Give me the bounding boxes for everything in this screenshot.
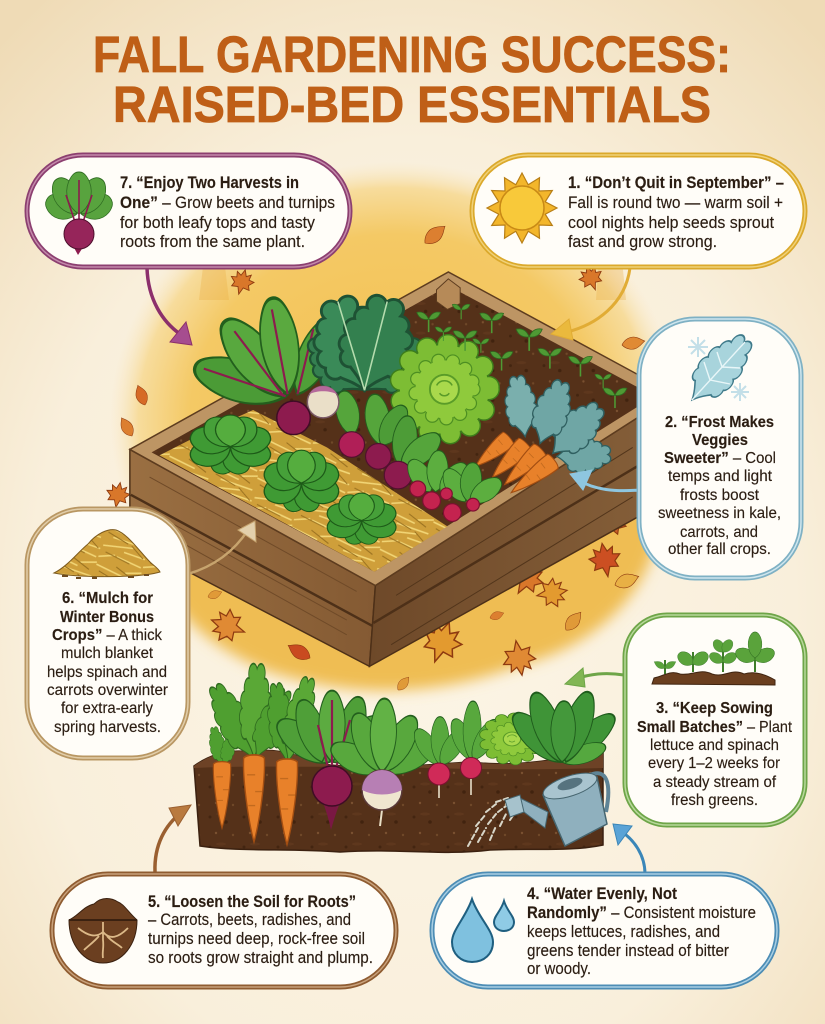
text block [120, 174, 335, 251]
text block: 2. “Frost Makes [665, 414, 774, 431]
scattered fall leaves [104, 221, 646, 693]
panel: step 2 frost [639, 319, 801, 578]
text block: 6. “Mulch for [62, 590, 153, 607]
arrow: step 3 to cross-section [565, 668, 624, 687]
bed: left wooden side [130, 449, 375, 666]
text block: 3. “Keep Sowing [656, 700, 773, 717]
plant: carrot greens [200, 663, 323, 768]
arrow: step 7 to beets [147, 268, 192, 345]
icon: water drops [452, 899, 514, 962]
text block [527, 885, 756, 978]
bed: corner post [437, 279, 460, 309]
plant: spinach in row [505, 688, 622, 771]
text block: fresh greens. [671, 792, 758, 809]
plant: lettuce [400, 345, 489, 434]
icon: mulch pile [54, 530, 160, 578]
plant: radishes in bed [402, 450, 506, 521]
text block: Fall is round two — warm soil + [568, 194, 783, 212]
text block: sweetness in kale, [658, 505, 781, 522]
panel: step 5 soil [52, 874, 396, 987]
text block: for both leafy tops and tasty [120, 214, 316, 232]
plant: beet and turnip roots [277, 386, 339, 435]
text block: Randomly” – Consistent moisture [527, 904, 756, 922]
panel: step 4 water [432, 874, 777, 987]
text block: Crops” – A thick [52, 627, 163, 644]
icon: sun [487, 173, 557, 243]
title [93, 26, 731, 133]
arrow: step 2 to carrots [570, 470, 640, 491]
watering can and spray [468, 768, 608, 846]
text block: 5. “Loosen the Soil for Roots” [148, 893, 356, 911]
bed: right wooden side [369, 394, 674, 666]
plant: spinach in mulch [186, 412, 400, 547]
plant: kale [295, 288, 434, 409]
plant: turnip with leaves [326, 698, 442, 826]
panel: step 3 sowing [625, 615, 805, 825]
bed: soil [152, 286, 654, 572]
panel: step 7 two harvests [27, 155, 350, 267]
text block [658, 414, 781, 558]
text block: frosts boost [680, 487, 760, 504]
plant: beet leaves [189, 295, 346, 415]
text block: 4. “Water Evenly, Not [527, 885, 677, 903]
text block: spring harvests. [54, 719, 161, 736]
plant: small beets [332, 389, 447, 489]
text block: – Carrots, beets, radishes, and [148, 911, 351, 929]
text block: temps and light [668, 468, 773, 485]
text block [148, 893, 373, 967]
title: FALL GARDENING SUCCESS: [93, 26, 731, 83]
arrow: step 5 to roots [155, 805, 191, 872]
soil cross-section [194, 750, 603, 852]
plant: beet with leaves [270, 691, 391, 830]
text block: for extra-early [61, 700, 153, 717]
bed: top rim [130, 272, 674, 586]
text block: Veggies [692, 432, 748, 449]
text block: keeps lettuces, radishes, and [527, 923, 720, 941]
text block: One” – Grow beets and turnips [120, 194, 335, 212]
plant: carrots in bed [470, 431, 560, 500]
text block [637, 700, 792, 809]
icon: soil with roots [69, 898, 137, 963]
text block: or woody. [527, 960, 591, 978]
arrow: step 6 to mulch [188, 521, 256, 574]
text block: 7. “Enjoy Two Harvests in [120, 174, 299, 192]
arrow: step 4 to watering can [613, 824, 645, 874]
text block: roots from the same plant. [120, 233, 305, 251]
text block: other fall crops. [668, 541, 771, 558]
plant: carrots in soil [213, 755, 297, 845]
text block: a steady stream of [653, 774, 777, 791]
text block: Small Batches” – Plant [637, 719, 792, 736]
bed: straw mulch [159, 410, 447, 572]
text block: every 1–2 weeks for [648, 755, 781, 772]
text block: greens tender instead of bitter [527, 942, 729, 960]
panel: step 1 September [472, 155, 805, 267]
text block: 1. “Don’t Quit in September” – [568, 174, 784, 192]
icon: beet [41, 172, 117, 255]
text block: Winter Bonus [60, 609, 154, 626]
plant: seedlings [417, 304, 627, 408]
text block [568, 174, 784, 251]
plant: blue-green carrot tops [501, 374, 613, 474]
text block: turnips need deep, rock-free soil [148, 930, 365, 948]
text block: fast and grow strong. [568, 233, 717, 251]
text block: Sweeter” – Cool [664, 450, 776, 467]
icon: frosted leaf [677, 326, 762, 413]
text block: carrots, and [680, 524, 758, 541]
text block: lettuce and spinach [650, 737, 779, 754]
text block: so roots grow straight and plump. [148, 949, 373, 967]
text block: cool nights help seeds sprout [568, 214, 774, 232]
arrow: step 1 to seedlings [551, 268, 630, 340]
title: RAISED-BED ESSENTIALS [113, 76, 711, 133]
autumn yellow ground backdrop [110, 162, 680, 690]
plant: lettuce in row [485, 718, 539, 760]
below-ground cross-section illustration [194, 663, 622, 852]
text block: carrots overwinter [47, 682, 169, 699]
icon: seedlings on soil [652, 632, 777, 685]
panel: step 6 mulch [27, 509, 188, 758]
text block [47, 590, 169, 736]
plant: radishes in soil [409, 701, 504, 798]
text block: mulch blanket [61, 645, 154, 662]
raised garden bed illustration [130, 272, 674, 666]
root: soil top band [194, 750, 603, 769]
text block: helps spinach and [47, 664, 167, 681]
